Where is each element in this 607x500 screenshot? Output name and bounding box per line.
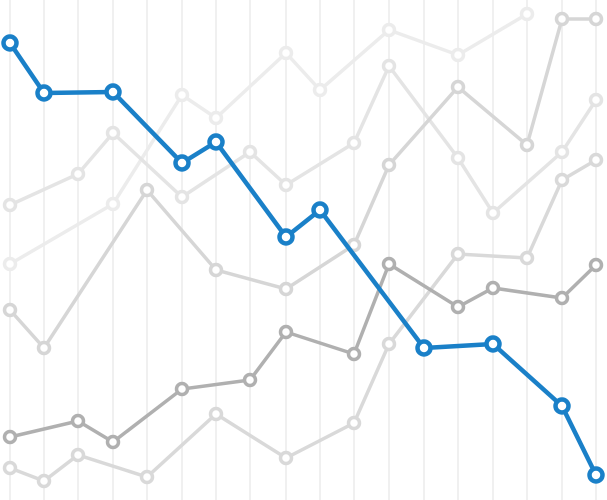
series D (very light) — [4, 8, 532, 270]
series B — [4, 14, 602, 354]
series dark gray — [4, 258, 602, 448]
series C (light) — [4, 60, 602, 218]
series A — [4, 154, 602, 486]
